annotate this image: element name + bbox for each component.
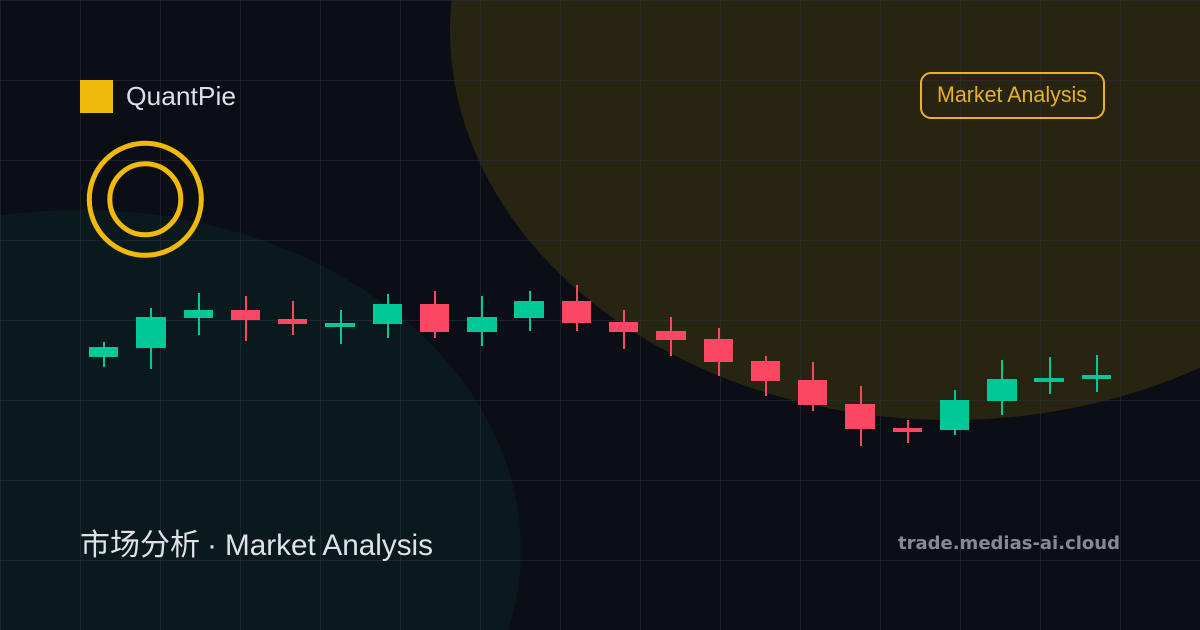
logo mark xyxy=(80,80,113,113)
candlestick chart xyxy=(89,285,1111,446)
headline: · xyxy=(207,529,217,562)
background blob: teal xyxy=(0,210,521,630)
site url: trade.medias-ai.cloud xyxy=(898,533,1120,554)
background blob: yellow xyxy=(450,0,1200,420)
tag: Market Analysis: Market Analysis xyxy=(937,82,1087,107)
headline: 市场分析 xyxy=(80,529,200,562)
headline xyxy=(80,529,433,562)
icon: concentric rings xyxy=(89,143,201,255)
headline: Market Analysis xyxy=(225,529,433,562)
tag: Market Analysis xyxy=(921,73,1104,118)
brand name: QuantPie xyxy=(126,81,236,111)
